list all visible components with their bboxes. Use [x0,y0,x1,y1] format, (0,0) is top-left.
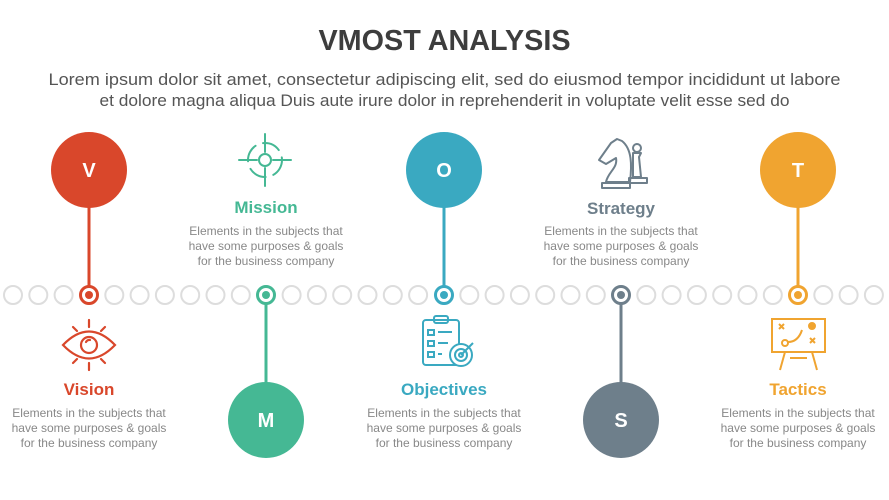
panel: V vision: have some purposes & goals [12,421,166,435]
panel: M mission [189,134,343,458]
subtitle: et dolore magna aliqua Duis aute irure dolor in reprehenderit in voluptate velit esse sed do [100,92,789,110]
panel: S strategy: Strategy [587,199,656,218]
panel: V vision: for the business company [21,436,157,450]
panel: M mission: Mission [234,198,298,217]
panel: O objectives: for the business company [376,436,512,450]
panel: O objectives [367,132,521,450]
panel: O objectives: Objectives [401,380,487,399]
title: VMOST ANALYSIS [318,25,570,57]
panel: S strategy [544,139,698,458]
panel: O objectives: have some purposes & goals [367,421,521,435]
icon: target [239,134,291,186]
panel: M mission: M [258,410,274,432]
panel: T tactics: T [792,160,804,182]
icon: tactics board [772,319,825,370]
panel: T tactics [721,132,875,450]
panel: O objectives: Elements in the subjects that [367,406,521,420]
subtitle: Lorem ipsum dolor sit amet, consectetur adipiscing elit, sed do eiusmod tempor incididunt ut labore [48,71,841,89]
icon: chess pieces [599,139,647,188]
panel: S strategy: S [614,410,628,432]
panel: V vision: V [82,160,96,182]
timeline dots [4,286,883,304]
panel: S strategy: for the business company [553,254,689,268]
panel: V vision: Elements in the subjects that [12,406,166,420]
icon: clipboard target [423,316,473,366]
panel: M mission: Elements in the subjects that [189,224,343,238]
panel: V vision [12,132,166,450]
panel: T tactics: for the business company [730,436,866,450]
icon: eye [63,320,115,370]
panel: T tactics: have some purposes & goals [721,421,875,435]
panel: M mission: have some purposes & goals [189,239,343,253]
panel: V vision: Vision [64,380,114,399]
panel: S strategy: Elements in the subjects that [544,224,698,238]
subtitle [48,71,841,110]
panel: T tactics: Tactics [769,380,827,399]
panel: T tactics: Elements in the subjects that [721,406,875,420]
panel: M mission: for the business company [198,254,334,268]
panel: O objectives: O [436,160,452,182]
panel: S strategy: have some purposes & goals [544,239,698,253]
